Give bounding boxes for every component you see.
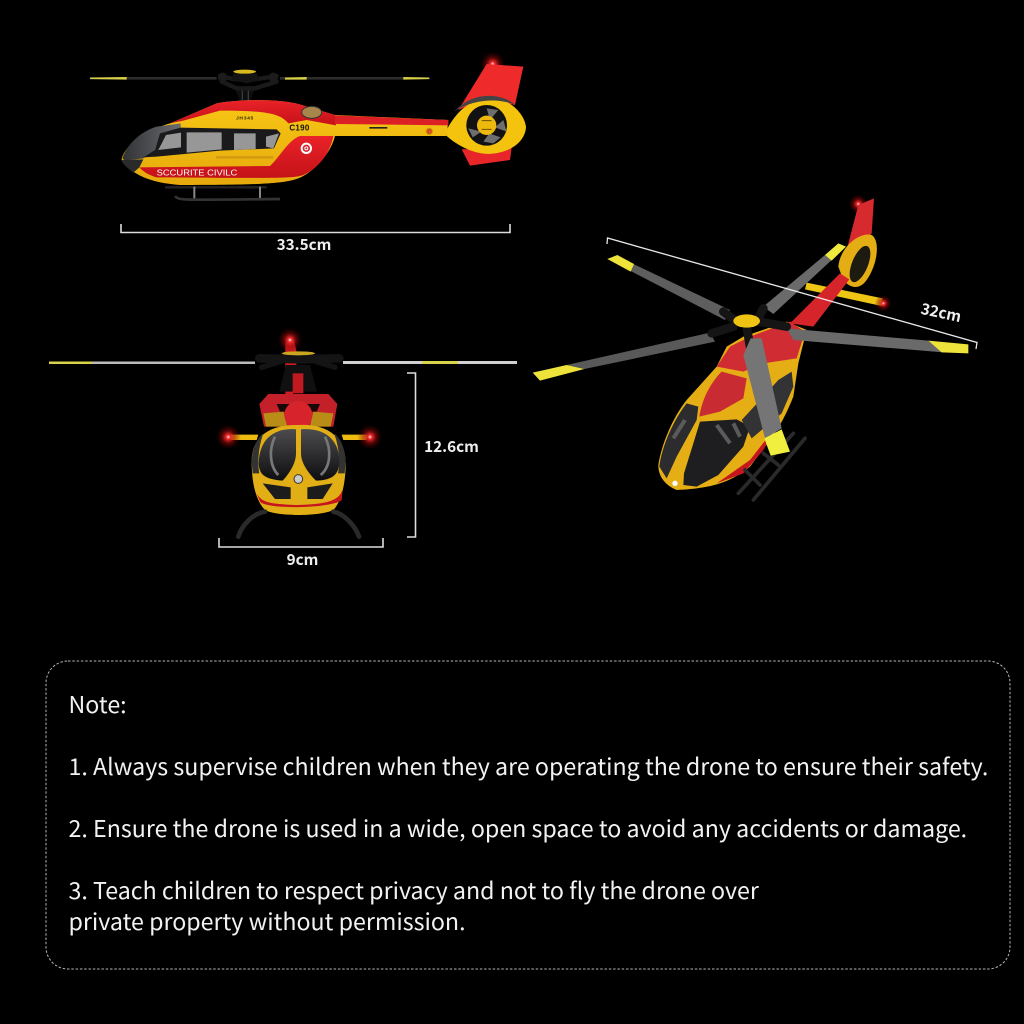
side landing skid	[165, 187, 280, 200]
angled red nose hood	[699, 372, 747, 417]
angled rotor head	[712, 308, 787, 347]
side red boom stripe	[335, 115, 448, 125]
side red belly	[139, 136, 333, 178]
angled tail boom	[790, 273, 849, 327]
front top glow	[277, 327, 303, 353]
front right windshield	[301, 429, 339, 481]
front view helicopter	[216, 327, 383, 537]
angled rear blade	[763, 243, 846, 314]
angled red lower edge	[717, 430, 773, 483]
angled windshield streaks	[673, 420, 740, 443]
label 33.5cm: 33.5cm	[277, 233, 331, 255]
side upper tail fin	[458, 64, 523, 110]
angled front blade	[743, 338, 790, 456]
front side glass	[252, 433, 346, 473]
side boom light	[425, 127, 433, 135]
height dimension bracket: 12.6cm	[407, 373, 479, 537]
side fuselage lettering: SCCURITE CIVILC	[157, 167, 237, 177]
angled left blades	[533, 255, 730, 381]
front engine cowling	[259, 394, 337, 427]
angled right windshield	[683, 419, 750, 487]
diagonal dimension line: 32cm	[607, 238, 977, 349]
label 12.6cm: 12.6cm	[424, 435, 479, 457]
label 32cm: 32cm	[919, 297, 963, 327]
front skids	[238, 512, 359, 537]
side JH345 mark: JH345	[236, 116, 254, 122]
front left windshield	[259, 429, 296, 481]
side C190 mark: C190	[289, 123, 310, 132]
front stabilizer glows	[216, 424, 383, 450]
label 9cm: 9cm	[287, 548, 318, 570]
front rotor head	[259, 351, 339, 393]
angled nose light	[672, 481, 678, 486]
angled tail fin	[847, 198, 874, 253]
note panel	[46, 661, 1010, 969]
angled side windows	[742, 372, 793, 438]
angled right blade	[787, 328, 968, 353]
width dimension bracket: 9cm	[219, 538, 383, 570]
front fuselage	[252, 425, 346, 515]
angled red cabin roof	[717, 322, 805, 372]
side main rotor	[90, 70, 429, 102]
front cowling dark intake band	[277, 404, 320, 412]
side tail glow	[480, 51, 505, 77]
front yellow cowling sides	[263, 412, 333, 427]
note item 3	[68, 872, 760, 937]
width dimension bracket: 33.5cm	[121, 224, 510, 255]
front chin windows	[263, 483, 333, 499]
side window panes	[158, 132, 279, 153]
side fenestron	[447, 96, 526, 154]
note item 3: 3. Teach children to respect privacy and not to fly the drone over	[68, 872, 760, 906]
side door line	[216, 156, 273, 159]
side exhaust	[302, 106, 322, 118]
note item 1: 1. Always supervise children when they are operating the drone to ensure their safety.	[68, 748, 988, 782]
angled left windshield	[659, 403, 698, 478]
angled fenestron	[838, 235, 877, 287]
front red chin band	[257, 490, 343, 507]
note item 2: 2. Ensure the drone is used in a wide, open space to avoid any accidents or damage.	[68, 810, 967, 844]
side windshield	[122, 123, 181, 161]
side roundel	[301, 143, 312, 154]
front tail fin	[285, 340, 297, 397]
angled tail glow	[848, 194, 868, 214]
angled stabilizer glow	[875, 295, 892, 312]
angled view helicopter	[533, 194, 968, 500]
side lower tail fin	[462, 147, 512, 166]
note heading: Note:	[68, 686, 127, 720]
side nose edge	[122, 159, 143, 173]
side boom handle	[369, 127, 387, 129]
angled fuselage	[658, 322, 807, 490]
angled stabilizer	[805, 283, 883, 306]
side window band	[143, 128, 281, 157]
side fuselage	[122, 100, 448, 185]
front nose light	[294, 475, 303, 483]
front window highlights	[271, 437, 329, 475]
angled landing skids	[738, 433, 805, 500]
front cowling intake	[284, 401, 312, 429]
side red roof	[170, 100, 336, 125]
note item 3: private property without permission.	[68, 903, 466, 937]
side view helicopter	[90, 51, 526, 200]
front stabilizers	[231, 435, 367, 440]
front rotor	[49, 361, 517, 364]
